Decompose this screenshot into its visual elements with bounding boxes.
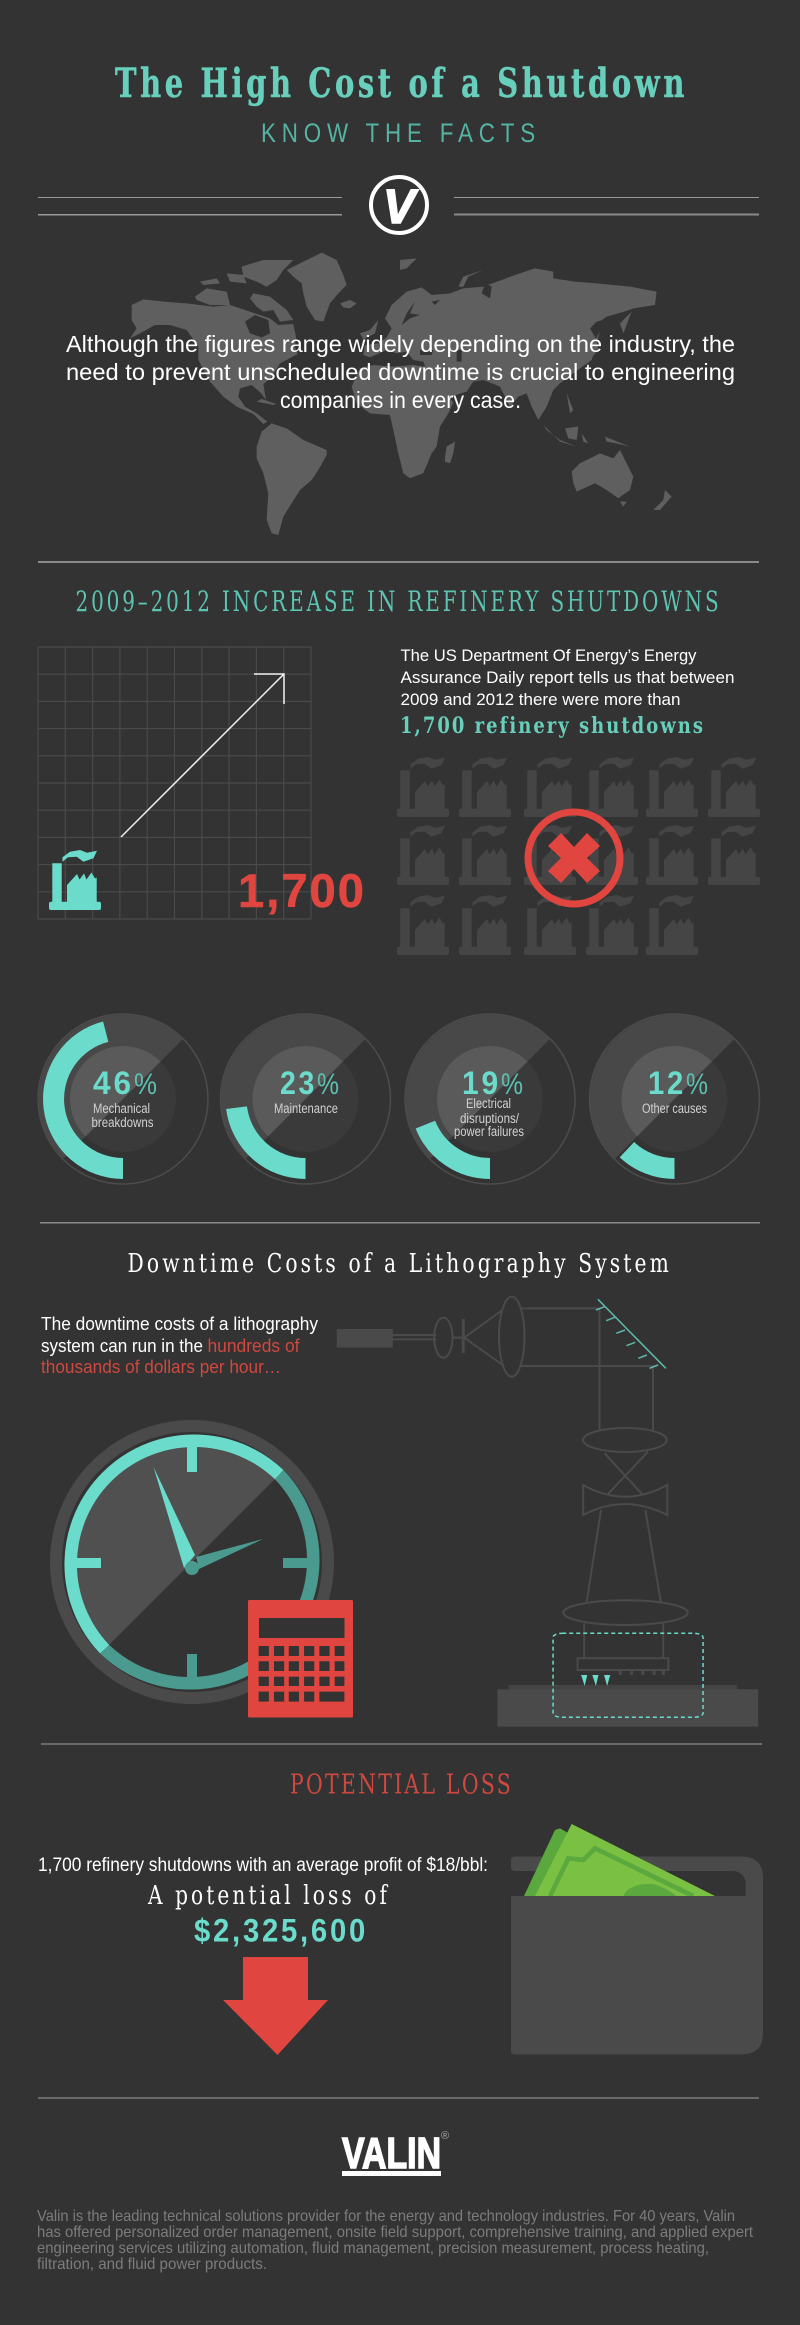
text: profit assumption: 1,700 refinery shutdowns with an average profit of $18/bbl:: [38, 1855, 488, 1876]
icon: red cross circle: [528, 812, 620, 904]
subtitle: KNOW THE FACTS: [261, 118, 541, 148]
text: a potential loss of: A potential loss of: [147, 1881, 390, 1911]
arrow: upward trend: [121, 674, 284, 837]
map: UK: [360, 320, 378, 339]
donut: 19% electrical disruptions: %: [501, 1068, 523, 1101]
donut: 12% other causes: [590, 1014, 760, 1184]
world map: [130, 253, 672, 535]
text: downtime costs: [41, 1314, 318, 1377]
panel: header: [38, 60, 759, 234]
icon: Valin V emblem: V: [383, 181, 419, 234]
number: loss amount: $2,325,600: [194, 1912, 368, 1948]
donut: 23% maintenance: %: [317, 1068, 339, 1101]
donut: 19% electrical disruptions: Electrical: [466, 1096, 511, 1111]
text: downtime costs: hundreds of: [208, 1336, 300, 1356]
map: Caribbean: [257, 399, 277, 405]
donut: 23% maintenance: 23: [280, 1065, 317, 1101]
text: company description: Valin is the leading technical solutions provider for the energy and technology industries. For 40 years, Valin: [37, 2208, 735, 2225]
number: 1,700: 1,700: [238, 864, 366, 917]
icon: clock: [56, 1426, 328, 1698]
text: company description: [37, 2208, 754, 2273]
logo: Valin: ®: [441, 2130, 449, 2142]
icon grid: grey factories: [397, 757, 760, 955]
donut: 19% electrical disruptions: power failures: [454, 1124, 524, 1139]
intro text: Although the figures range widely depending on the industry, the: [66, 331, 735, 357]
mirror: [596, 1299, 666, 1368]
diagram: lithography system: [338, 1297, 758, 1727]
map: northern islands: [400, 258, 632, 333]
callout: 1,700 refinery shutdowns: 1,700 refinery shutdowns: [400, 713, 705, 739]
text: downtime costs: thousands of dollars per hour…: [41, 1357, 281, 1377]
heading: potential loss: POTENTIAL LOSS: [290, 1770, 513, 1800]
icon: calculator: [248, 1600, 353, 1718]
intro text: [66, 331, 735, 413]
map: Australia: [572, 450, 633, 498]
intro text: companies in every case.: [280, 387, 521, 413]
icon: teal factory: [49, 850, 101, 910]
donut: 19% electrical disruptions: 19: [462, 1065, 501, 1101]
map: Greenland: [287, 253, 347, 322]
donut: 46% mechanical breakdowns: %: [134, 1068, 157, 1101]
donut: 12% other causes: Other causes: [642, 1101, 707, 1116]
text: company description: filtration, and fluid power products.: [37, 2256, 267, 2273]
donut: 12% other causes: 12: [648, 1065, 686, 1101]
map: Southeast Asia islands: [543, 332, 630, 447]
map: South America: [257, 423, 327, 535]
text: downtime costs: system can run in the: [41, 1336, 203, 1356]
donut: 12% other causes: %: [686, 1068, 708, 1101]
text: DOE report: Assurance Daily report tells us that between: [400, 668, 734, 687]
map: Eurasia: [363, 268, 657, 420]
donut: 19% electrical disruptions: disruptions/: [460, 1111, 519, 1126]
map: Iceland: [340, 300, 357, 308]
intro text: need to prevent unscheduled downtime is crucial to engineering: [66, 359, 735, 385]
donut: 23% maintenance: Maintenance: [274, 1101, 338, 1116]
arrow: red down: [223, 1957, 328, 2055]
icon: Valin V emblem: [371, 177, 427, 234]
text: downtime costs: The downtime costs of a lithography: [41, 1314, 318, 1334]
icon: wallet with cash: [511, 1824, 763, 2054]
logo: Valin: VALIN: [342, 2129, 441, 2178]
text: DOE report: 2009 and 2012 there were more than: [400, 690, 680, 709]
donut: 19% electrical disruptions: [405, 1014, 575, 1184]
donut: 23% maintenance: [220, 1014, 390, 1184]
text: DOE report: The US Department Of Energy’s Energy: [400, 646, 697, 665]
map: Tasmania and New Zealand: [620, 490, 672, 510]
donut: 46% mechanical breakdowns: breakdowns: [92, 1115, 154, 1130]
dashed focus box: [553, 1633, 703, 1717]
chart: growth grid: [38, 647, 366, 919]
donut: 46% mechanical breakdowns: [38, 1014, 208, 1184]
donut: 46% mechanical breakdowns: Mechanical: [93, 1101, 150, 1116]
donut: 46% mechanical breakdowns: 46: [93, 1065, 134, 1101]
map: Africa: [352, 365, 453, 478]
clock hands: [154, 1467, 263, 1575]
map: North America: [130, 299, 298, 424]
map: Madagascar: [445, 442, 455, 463]
map: Arctic islands: [195, 260, 293, 322]
teal rays: [581, 1675, 610, 1686]
text: company description: has offered personalized order management, onsite field support, comprehensive training, and applied expert: [37, 2224, 754, 2241]
text: company description: engineering services utilizing automation, fluid management, precision measurement, process heating,: [37, 2240, 709, 2257]
text: DOE report: [400, 646, 734, 709]
